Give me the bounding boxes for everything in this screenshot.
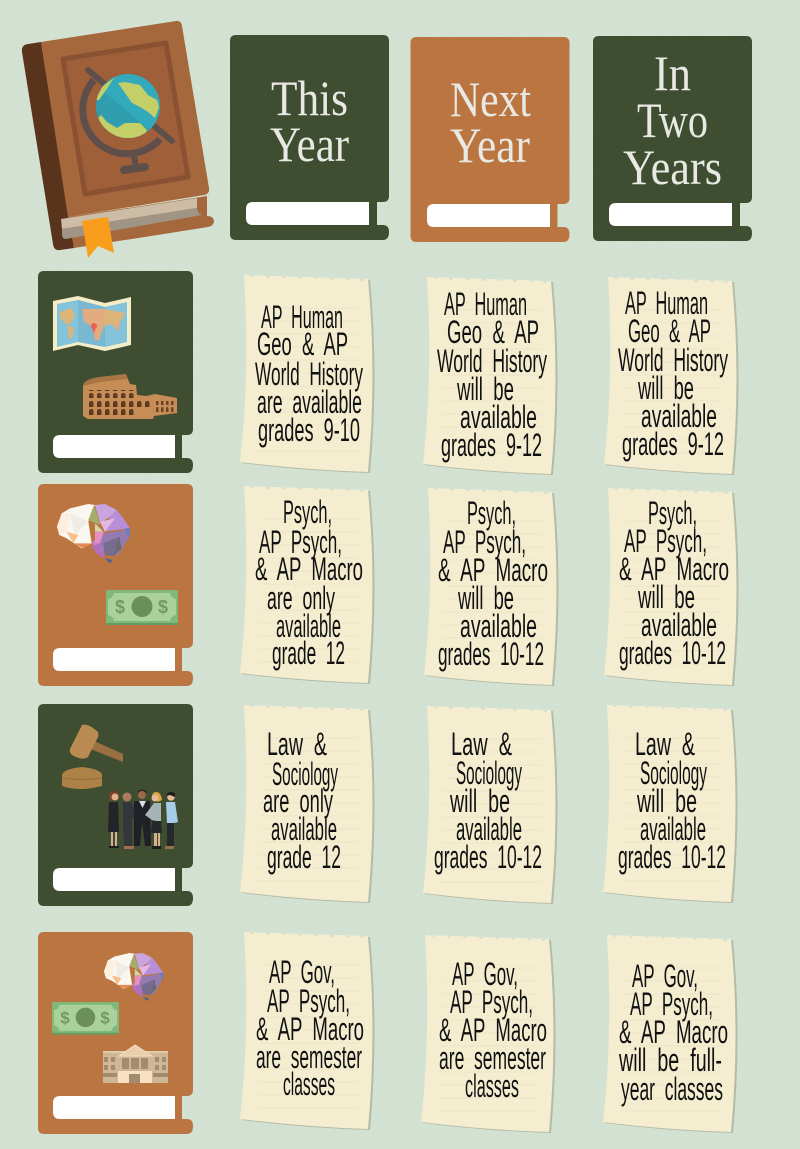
icon: world map [53,296,131,351]
note: in two years, geography and world history: will be [637,370,694,406]
note: next year, law and sociology: available [456,811,522,847]
header book: In Two Years [593,36,752,241]
note: this year, geography and world history [240,273,374,473]
note: in two years, psychology and macro [604,486,738,686]
heading: This Year: This [271,70,348,126]
note: this year, government and macro: AP Gov, [269,954,335,990]
note: this year, law and sociology: Sociology [272,756,338,792]
note: next year, law and sociology: Law & [451,726,512,762]
note: in two years, government and macro [603,933,738,1133]
note: in two years, psychology and macro: will be [637,579,695,615]
icon: globe book [22,21,214,258]
heading: This Year [270,70,349,172]
note: in two years, law and sociology: available [640,811,706,847]
heading: Next Year: Year [450,117,530,173]
note: in two years, geography and world history [604,275,738,475]
note: next year, geography and world history: Geo & AP [447,314,539,350]
note: in two years, psychology and macro: Psych, [648,495,697,531]
note: this year, geography and world history: AP Human [261,299,343,335]
note: in two years, government and macro: AP Psych, [630,986,713,1022]
note: this year, geography and world history: grades 9-10 [258,412,360,448]
note: this year, psychology and macro: grade 12 [272,635,345,671]
note: this year, government and macro: & AP Macro [256,1011,364,1047]
note: in two years, law and sociology [603,703,738,903]
note: in two years, geography and world history: grades 9-12 [622,426,724,462]
note: next year, geography and world history: available [460,399,537,435]
note: this year, psychology and macro: AP Psych, [259,524,342,560]
note: this year, geography and world history: Geo & AP [257,326,348,362]
heading: In Two Years: Two [637,92,708,148]
note: this year, government and macro [240,930,374,1130]
note: in two years, government and macro: AP Gov, [632,958,698,994]
note: this year, geography and world history: are available [257,384,362,420]
note: next year, psychology and macro: AP Psych, [443,524,526,560]
note: this year, psychology and macro: are only [267,580,335,616]
note: this year, psychology and macro: & AP Macro [255,551,363,587]
note: this year, psychology and macro [240,484,374,684]
note: next year, geography and world history [423,275,558,475]
note: in two years, geography and world history: AP Human [625,285,708,321]
heading: In Two Years: In [654,45,691,101]
header book: This Year [230,35,389,240]
note: this year, law and sociology: are only [263,783,333,819]
note: next year, law and sociology: grades 10-12 [434,839,542,875]
note: this year, law and sociology: Law & [267,726,327,762]
note: this year, law and sociology: grade 12 [267,839,341,875]
note: this year, law and sociology [240,703,374,903]
heading: Next Year: Next [450,71,531,127]
note: in two years, geography and world history: available [641,398,717,434]
note: in two years, psychology and macro: & AP Macro [619,551,729,587]
note: next year, government and macro: AP Gov, [452,956,518,992]
note: this year, geography and world history: World History [255,356,363,392]
heading: In Two Years: Years [623,139,722,195]
note: this year, law and sociology: available [271,811,337,847]
note: next year, geography and world history: World History [437,343,547,379]
heading: Next Year [450,71,531,173]
icon: government building [103,1045,168,1083]
note: in two years, law and sociology: Sociology [640,755,707,791]
row 4 book: government, psychology and economics [38,932,193,1134]
note: in two years, government and macro: will be full- [618,1042,722,1078]
note: next year, psychology and macro: & AP Macro [438,552,548,588]
note: next year, law and sociology [423,704,558,904]
row 3 book: law and sociology [38,704,193,906]
note: next year, law and sociology: Sociology [456,755,522,791]
note: next year, geography and world history: AP Human [444,286,527,322]
note: this year, government and macro: classes [283,1066,335,1102]
row 1 book: geography and history [38,271,193,473]
note: this year, psychology and macro: Psych, [283,494,332,530]
note: next year, geography and world history: grades 9-12 [441,427,542,463]
note: in two years, law and sociology: will be [636,783,697,819]
note: next year, government and macro: classes [465,1068,519,1104]
note: in two years, geography and world history: Geo & AP [628,313,711,349]
note: next year, government and macro: are semester [439,1040,546,1076]
note: this year, government and macro: are semester [256,1039,362,1075]
note: next year, psychology and macro: available [460,608,537,644]
icon: dollar bill [106,590,178,625]
note: in two years, law and sociology: Law & [635,726,695,762]
note: next year, psychology and macro: grades 10-12 [438,636,544,672]
note: next year, government and macro [421,933,556,1133]
note: in two years, psychology and macro: AP Psych, [624,523,707,559]
header book: Next Year [410,37,570,242]
note: next year, geography and world history: will be [456,371,514,407]
note: next year, psychology and macro [424,486,558,686]
note: this year, psychology and macro: available [276,608,341,644]
note: next year, law and sociology: will be [449,783,510,819]
icon: brain [104,953,163,1001]
heading: This Year: Year [270,116,349,172]
heading: In Two Years [623,45,722,195]
icon: gavel [62,725,123,789]
note: next year, government and macro: & AP Macro [439,1012,547,1048]
row 2 book: psychology and economics [38,484,193,686]
icon: brain [57,504,130,563]
note: next year, government and macro: AP Psych, [450,984,533,1020]
icon: business people [108,790,178,849]
note: next year, psychology and macro: Psych, [467,495,516,531]
icon: colosseum [83,374,177,419]
note: next year, psychology and macro: will be [457,580,514,616]
note: this year, government and macro: AP Psych, [267,983,350,1019]
note: in two years, psychology and macro: available [641,607,717,643]
icon: dollar bill [52,1002,119,1035]
note: in two years, government and macro: & AP Macro [619,1014,728,1050]
